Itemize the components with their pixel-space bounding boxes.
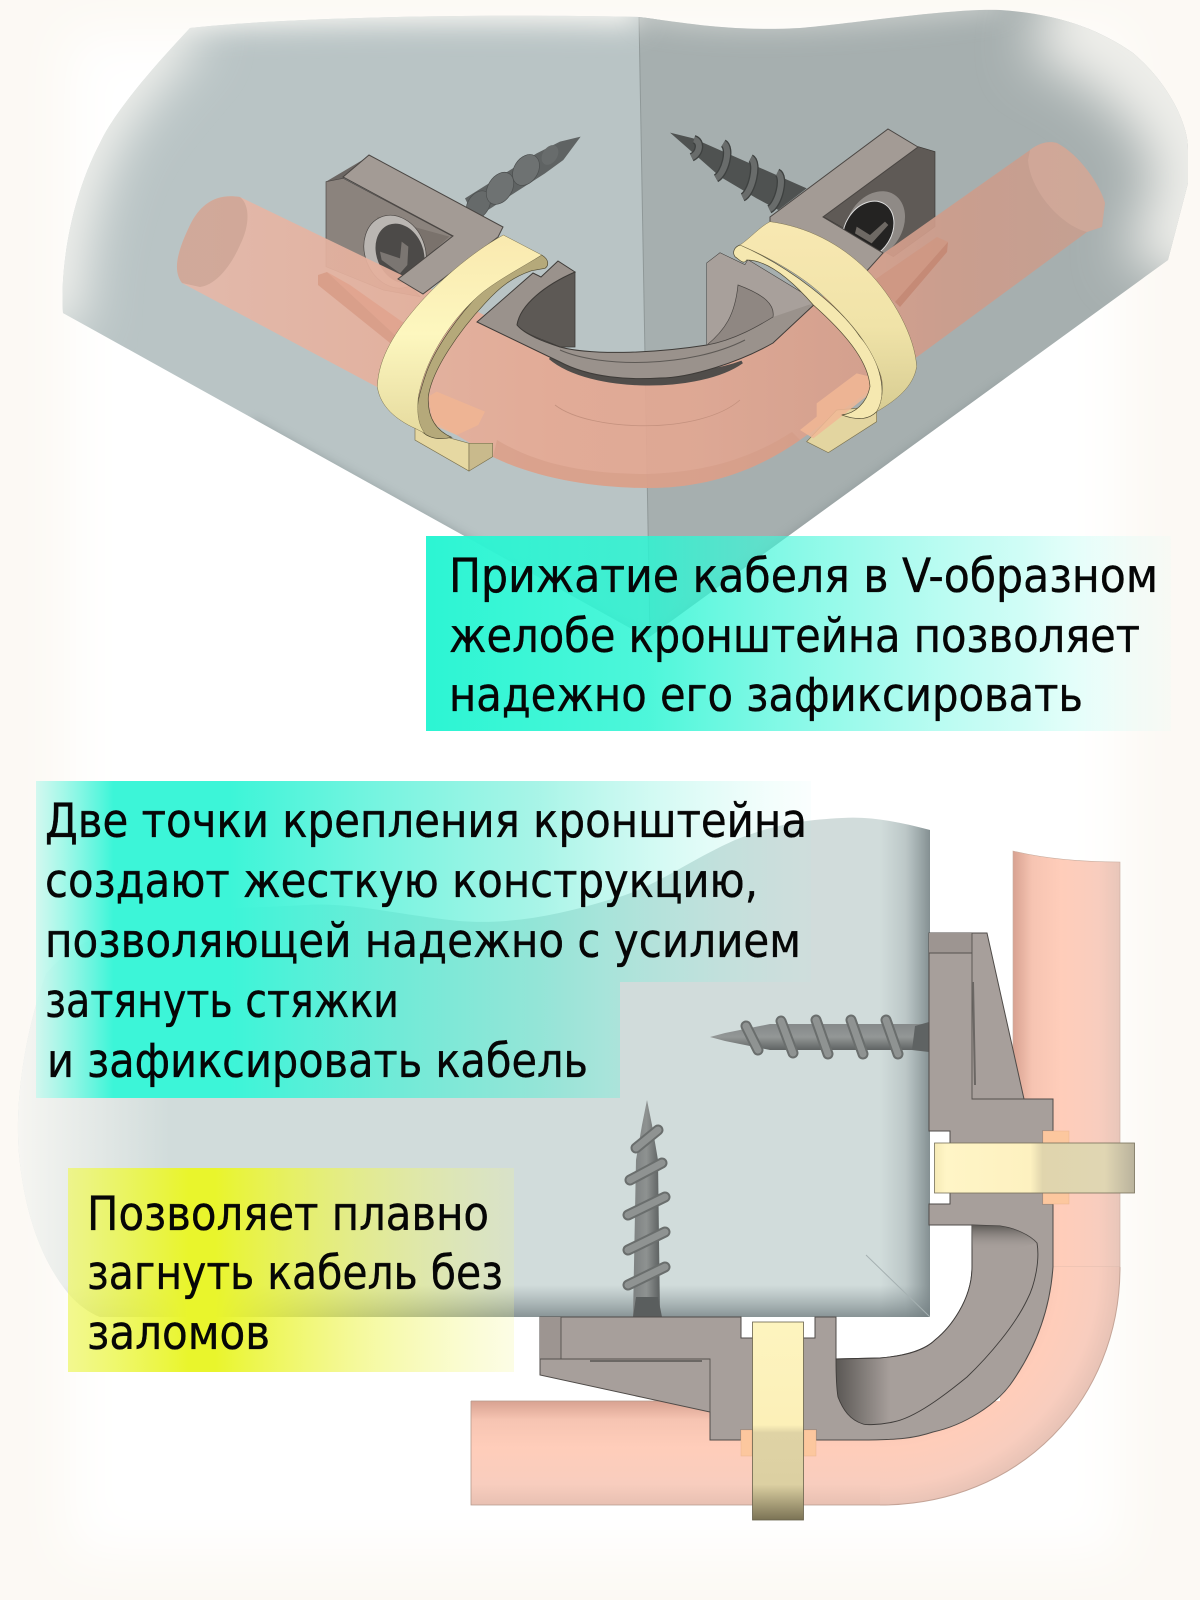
central V-groove of the bracket — [477, 253, 817, 384]
left block face and hole — [326, 156, 453, 298]
vertical wall — [0, 800, 940, 1330]
cable: translucent pink pipe — [177, 142, 1105, 488]
callout: smooth bend text: загнуть кабель без — [87, 1246, 503, 1301]
callout: two mounting points text: создают жесткую конструкцию, — [45, 854, 758, 909]
left cable tie — [377, 235, 548, 471]
callout: smooth bend text — [68, 1168, 514, 1372]
right screw — [670, 133, 807, 210]
cable: bent pipe — [471, 851, 1120, 1505]
left screw — [461, 137, 581, 224]
callout: V-groove text: желобе кронштейна позволяет — [449, 609, 1140, 664]
bracket top flanges — [343, 129, 918, 294]
callout: two mounting points text — [36, 781, 811, 1098]
callout: two mounting points text: Две точки крепления кронштейна — [45, 794, 807, 849]
callout: V-groove text: Прижатие кабеля в V-образном — [449, 549, 1158, 604]
right block face and hole — [823, 147, 935, 270]
horizontal screw — [710, 1020, 929, 1054]
panel: side view of the cable bracket — [0, 800, 1134, 1520]
callout: two mounting points text: затянуть стяжки — [45, 974, 399, 1029]
callout: V-groove text: надежно его зафиксировать — [449, 668, 1083, 723]
callout: smooth bend text: заломов — [87, 1306, 270, 1361]
wall corner — [0, 0, 1200, 650]
callout: V-groove text — [426, 536, 1171, 731]
curved channel of the bracket — [836, 1225, 1038, 1425]
panel: corner view of the cable bracket — [0, 0, 1200, 650]
vertical screw — [628, 1100, 665, 1317]
callout: two mounting points text: позволяющей надежно с усилием — [45, 914, 801, 969]
callout: two mounting points text: и зафиксировать кабель — [47, 1034, 588, 1089]
bracket back faces and screw holes — [326, 147, 935, 298]
lower cable tie — [741, 1322, 816, 1520]
upper cable tie — [934, 1131, 1134, 1204]
right cable tie — [734, 222, 917, 453]
bracket side profile — [540, 933, 1053, 1440]
callout: smooth bend text: Позволяет плавно — [87, 1187, 489, 1242]
